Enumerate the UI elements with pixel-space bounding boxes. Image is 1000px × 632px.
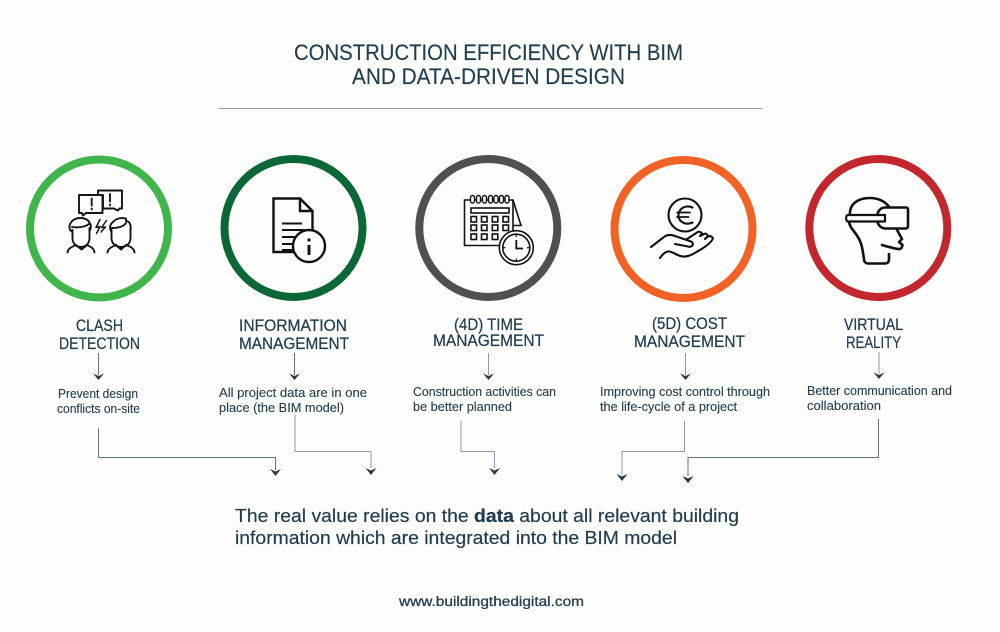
- ring: time management: [419, 159, 557, 297]
- heading: information management: [239, 317, 349, 353]
- text: clash description: [57, 387, 140, 416]
- text: virtual reality description: collaboration: [807, 399, 881, 413]
- text: time description: [413, 385, 556, 414]
- text: clash description: conflicts on-site: [57, 402, 140, 416]
- heading: clash detection: DETECTION: [59, 335, 140, 353]
- arrow: cost down: [680, 353, 691, 380]
- heading: time management: [433, 316, 544, 350]
- panel: time management: [413, 159, 557, 475]
- heading: virtual reality: VIRTUAL: [844, 316, 903, 334]
- arrow: time down: [483, 353, 494, 380]
- text: cost description: Improving cost control through: [600, 385, 770, 399]
- ring: virtual reality: [809, 159, 947, 297]
- title: CONSTRUCTION EFFICIENCY WITH BIM: [294, 40, 683, 65]
- arrow: virtual reality connector: [682, 419, 878, 483]
- heading: time management: (4D) TIME: [454, 316, 523, 334]
- heading: time management: MANAGEMENT: [433, 332, 544, 350]
- ring: clash detection: [30, 160, 168, 298]
- text: time description: be better planned: [413, 400, 512, 414]
- heading: information management: INFORMATION: [239, 317, 347, 335]
- text: conclusion: The real value relies on the data about all relevant building: [235, 505, 739, 526]
- heading: clash detection: CLASH: [76, 317, 123, 335]
- arrow: clash down: [93, 353, 104, 380]
- arrow: virtual reality down: [874, 352, 884, 379]
- heading: information management: MANAGEMENT: [239, 335, 349, 353]
- arrow: time connector: [461, 421, 500, 475]
- title: AND DATA-DRIVEN DESIGN: [352, 64, 625, 89]
- ring: cost management: [614, 160, 752, 298]
- text: clash description: Prevent design: [58, 387, 138, 401]
- heading: virtual reality: [844, 316, 903, 352]
- ring: information management: [224, 159, 362, 297]
- icon: hand with euro coin: [651, 198, 713, 258]
- panel: cost management: [600, 160, 770, 481]
- text: information description: All project data are in one: [219, 386, 367, 400]
- text: virtual reality description: [807, 384, 952, 413]
- heading: cost management: (5D) COST: [652, 315, 727, 333]
- panel: virtual reality: [682, 159, 952, 483]
- text: time description: Construction activities can: [413, 385, 556, 399]
- icon: calendar and clock: [464, 196, 533, 265]
- text: conclusion: information which are integrated into the BIM model: [235, 527, 677, 548]
- text: virtual reality description: Better communication and: [807, 384, 952, 398]
- title: [294, 40, 683, 89]
- arrow: information connector: [295, 415, 376, 475]
- panel: information management: [219, 159, 376, 475]
- footer url: www.buildingthedigital.com: [398, 594, 584, 609]
- icon: two people in conflict: [68, 190, 134, 252]
- panel: clash detection: [30, 160, 281, 476]
- icon: head with VR headset: [846, 198, 908, 264]
- arrow: information down: [289, 353, 300, 380]
- text: conclusion: [235, 505, 739, 548]
- arrow: clash connector: [98, 428, 281, 476]
- heading: virtual reality: REALITY: [846, 334, 901, 352]
- heading: cost management: [634, 315, 745, 351]
- heading: clash detection: [59, 317, 140, 353]
- text: information description: place (the BIM model): [219, 401, 344, 415]
- heading: cost management: MANAGEMENT: [634, 333, 745, 351]
- text: cost description: [600, 385, 770, 414]
- text: cost description: the life-cycle of a project: [600, 400, 738, 414]
- arrow: cost connector: [616, 421, 684, 481]
- text: information description: [219, 386, 367, 415]
- icon: document with info: [274, 198, 325, 262]
